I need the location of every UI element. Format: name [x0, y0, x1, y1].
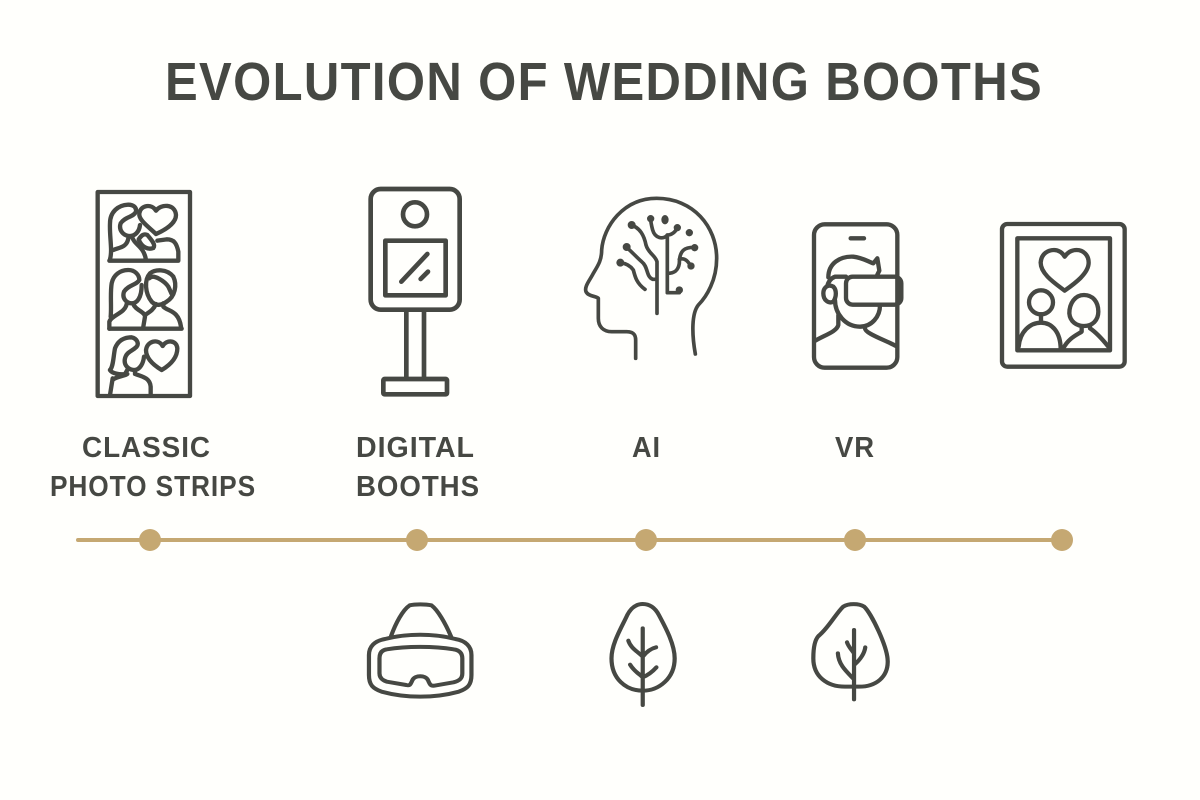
icon: digital booth: [371, 189, 460, 394]
icon: classic photo strip: [98, 192, 190, 396]
label: digital booths: BOOTHS: [356, 471, 480, 503]
label: digital booths: DIGITAL: [356, 432, 475, 464]
icon: rounded tree: [813, 604, 888, 699]
icon: AI head: [586, 198, 717, 358]
timeline: [78, 529, 1073, 551]
icon: VR headset: [369, 604, 471, 697]
icon: VR phone: [814, 224, 901, 368]
title: EVOLUTION OF WEDDING BOOTHS: [165, 52, 1043, 112]
icon: leaf tree: [611, 604, 675, 705]
label: classic photo strips: [50, 432, 256, 503]
label: VR: VR: [835, 432, 875, 464]
label: AI: AI: [632, 432, 661, 464]
label: classic photo strips: CLASSIC: [82, 432, 211, 464]
icon: framed couple photo: [1002, 224, 1125, 367]
label: classic photo strips: PHOTO STRIPS: [50, 471, 256, 503]
label: digital booths: [356, 432, 480, 503]
